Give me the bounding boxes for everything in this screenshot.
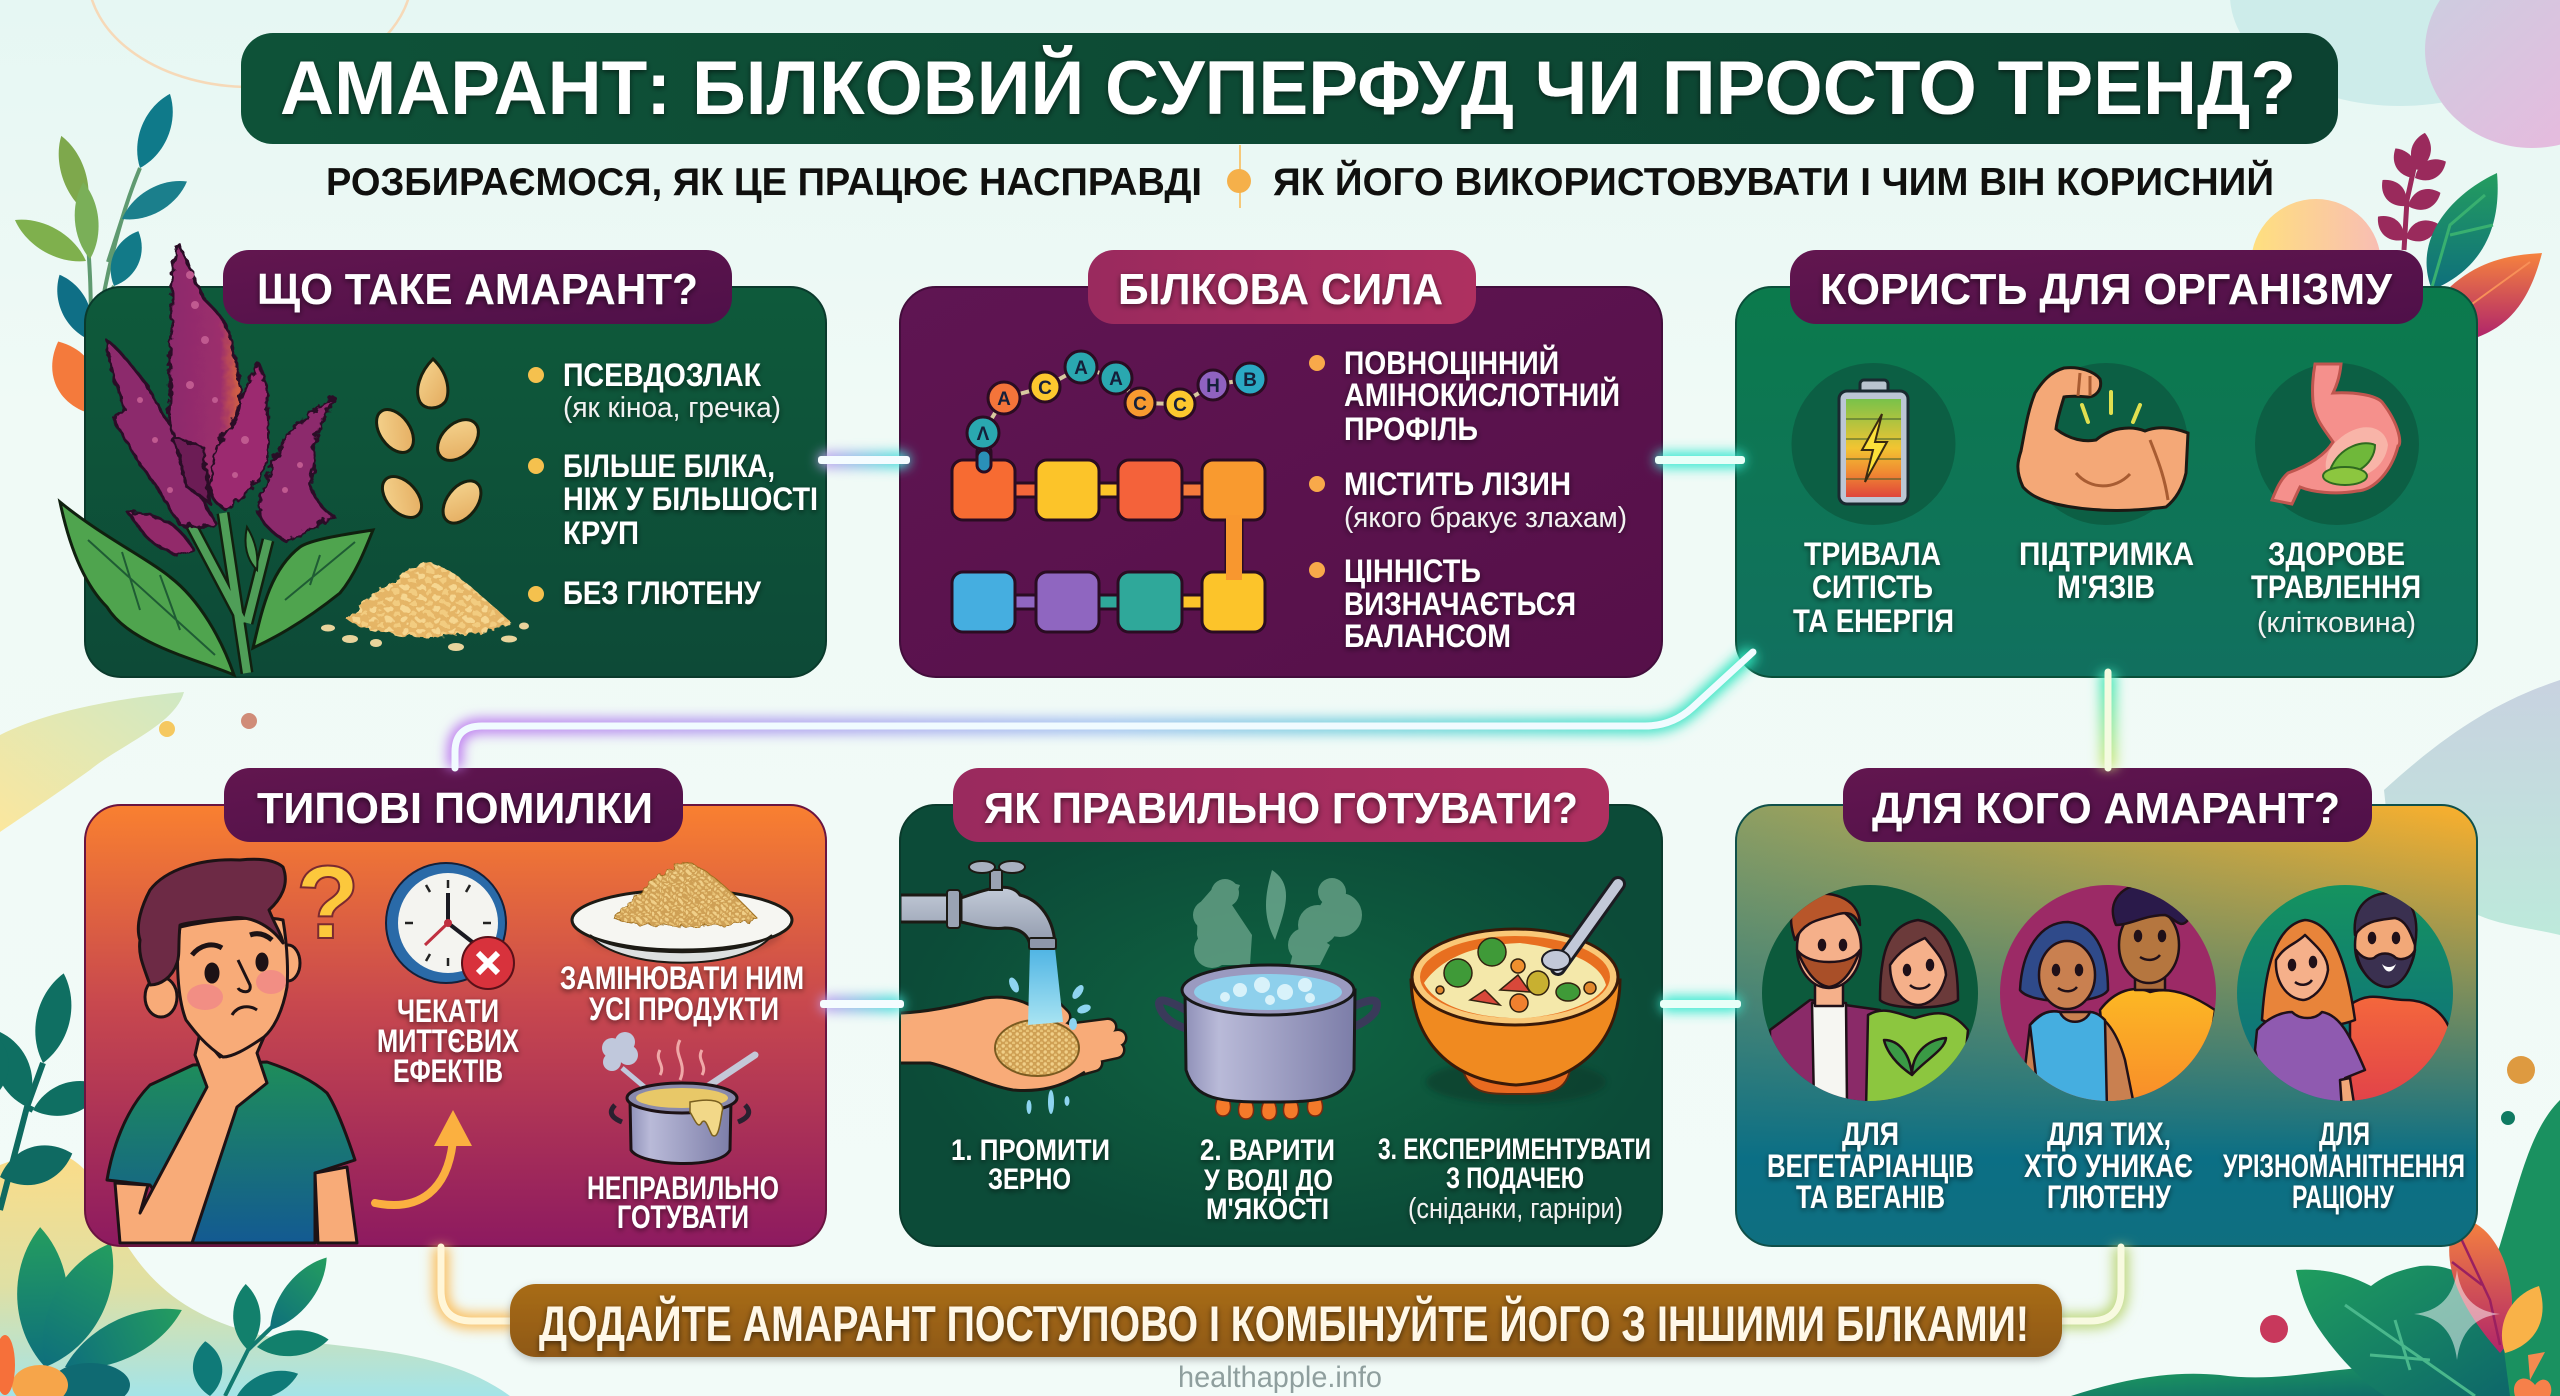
text: expect instant effects: ЕФЕКТІВ: [393, 1053, 503, 1089]
list: protein power: БАЛАНСОМ: [1344, 618, 1511, 654]
chart: amino acid chain: C: [1173, 395, 1187, 416]
heading: who amaranth is for: ДЛЯ КОГО АМАРАНТ?: [1872, 784, 2340, 833]
text: benefits captions: (клітковина): [2257, 607, 2416, 639]
list: protein power: МІСТИТЬ ЛІЗИН: [1344, 466, 1571, 502]
text: audience captions: ДЛЯ: [1842, 1116, 1899, 1152]
list: protein power: ПРОФІЛЬ: [1344, 411, 1478, 447]
list: what is amaranth: ПСЕВДОЗЛАК: [563, 357, 761, 393]
chart: amino acid chain: A: [1074, 358, 1088, 379]
icon: battery: [1792, 363, 1956, 525]
text: step three: (сніданки, гарніри): [1408, 1193, 1623, 1225]
panel: who amaranth is for: [1736, 768, 2477, 1246]
decor: left lower leaves: [0, 970, 338, 1396]
text: expect instant effects: [377, 993, 520, 1089]
chart: amino acid chain: Λ: [977, 424, 990, 445]
connector: purple line from benefits to mistakes: [455, 652, 1753, 768]
text: expect instant effects: ЧЕКАТИ: [397, 993, 499, 1029]
chart: amino acid chain: C: [1038, 378, 1052, 399]
chart: amino acid chain: A: [997, 389, 1011, 410]
text: audience captions: ТА ВЕГАНІВ: [1796, 1179, 1945, 1215]
text: cook incorrectly: ГОТУВАТИ: [617, 1199, 749, 1235]
list: protein power: [1309, 345, 1627, 654]
text: step three: З ПОДАЧЕЮ: [1446, 1162, 1584, 1195]
text: step two: 2. ВАРИТИ: [1200, 1134, 1335, 1167]
icon: boiling pot: [1159, 870, 1377, 1120]
text: benefits captions: ТРАВЛЕННЯ: [2251, 569, 2421, 605]
text: step one: 1. ПРОМИТИ: [951, 1134, 1110, 1167]
text: benefits captions: ТРИВАЛА: [1804, 536, 1941, 572]
list: what is amaranth: (як кіноа, гречка): [563, 392, 781, 424]
chart: amino acid chain: [952, 351, 1266, 632]
icon: stomach: [2255, 363, 2419, 525]
heading: protein power: БІЛКОВА СИЛА: [1118, 265, 1443, 314]
text: step three: [1378, 1133, 1651, 1225]
text: audience captions: УРІЗНОМАНІТНЕННЯ: [2223, 1148, 2465, 1184]
panel: typical mistakes: [85, 768, 826, 1246]
icon: plate with grain: [572, 862, 792, 963]
title banner: АМАРАНТ: БІЛКОВИЙ СУПЕРФУД ЧИ ПРОСТО ТРЕНД?: [280, 45, 2296, 131]
icon: amaranth plant: [60, 243, 373, 675]
text: benefits captions: М'ЯЗІВ: [2057, 569, 2155, 605]
text: benefits captions: ПІДТРИМКА: [2019, 536, 2194, 572]
text: expect instant effects: МИТТЄВИХ: [377, 1023, 520, 1059]
list: protein power: ЦІННІСТЬ: [1344, 553, 1481, 589]
icon: amaranth seeds: [369, 359, 489, 530]
text: cook incorrectly: [587, 1170, 779, 1235]
heading: benefits: КОРИСТЬ ДЛЯ ОРГАНІЗМУ: [1820, 265, 2393, 314]
list: what is amaranth: КРУП: [563, 515, 639, 551]
connector: cooking to audience: [1660, 996, 1741, 1012]
list: what is amaranth: НІЖ У БІЛЬШОСТІ: [563, 481, 818, 517]
list: protein power: ПОВНОЦІННИЙ: [1344, 345, 1559, 381]
icon: varied diet couple: [2237, 885, 2453, 1110]
text: audience captions: ГЛЮТЕНУ: [2047, 1179, 2172, 1215]
text: replace all foods: УСІ ПРОДУКТИ: [589, 991, 779, 1027]
connector: audience to call to action: [2055, 1247, 2121, 1321]
connector: mistakes to call to action: [441, 1247, 515, 1321]
connector: what is to protein: [818, 452, 910, 468]
heading: how to cook: ЯК ПРАВИЛЬНО ГОТУВАТИ?: [984, 784, 1578, 833]
icon: bowl with porridge: [1411, 884, 1620, 1104]
list: protein power: ВИЗНАЧАЄТЬСЯ: [1344, 586, 1576, 622]
list: protein power: АМІНОКИСЛОТНИЙ: [1344, 377, 1620, 413]
text: audience captions: ДЛЯ: [2319, 1116, 2370, 1152]
text: replace all foods: [560, 960, 804, 1027]
icon: vegetarian couple: [1762, 885, 1978, 1110]
heading: how to cook: [953, 768, 1609, 842]
connector: mistakes to cooking: [820, 996, 904, 1012]
text: step two: У ВОДІ ДО: [1204, 1164, 1333, 1197]
connector: protein to benefits: [1655, 452, 1745, 468]
icon: gluten-free couple: [2000, 884, 2216, 1110]
icon: pile of grain: [321, 562, 529, 651]
chart: amino acid chain: H: [1206, 376, 1220, 397]
icon: tap and washing hand: [900, 861, 1118, 1114]
list: protein power: (якого бракує злахам): [1344, 502, 1627, 534]
panel: protein power: [900, 250, 1662, 677]
panel: how to cook: [900, 768, 1662, 1246]
text: audience captions: ХТО УНИКАЄ: [2024, 1148, 2193, 1184]
icon: thinking man: [107, 859, 357, 1243]
text: benefits captions: ТА ЕНЕРГІЯ: [1793, 603, 1954, 639]
call to action banner: [510, 1284, 2062, 1357]
icon: boiling-over pot: [602, 1032, 755, 1164]
chart: amino acid chain: B: [1243, 370, 1257, 391]
heading: who amaranth is for: [1843, 768, 2372, 842]
panel: what is amaranth: [60, 243, 826, 677]
text: benefits captions: СИТІСТЬ: [1812, 569, 1933, 605]
text: step two: [1200, 1134, 1335, 1226]
heading: typical mistakes: [224, 768, 683, 842]
list: what is amaranth: БІЛЬШЕ БІЛКА,: [563, 448, 775, 484]
text: replace all foods: ЗАМІНЮВАТИ НИМ: [560, 960, 804, 996]
text: cook incorrectly: НЕПРАВИЛЬНО: [587, 1170, 779, 1206]
text: step one: ЗЕРНО: [988, 1163, 1071, 1196]
heading: protein power: [1088, 250, 1476, 324]
text: step three: 3. ЕКСПЕРИМЕНТУВАТИ: [1378, 1133, 1651, 1166]
chart: amino acid chain: A: [1109, 369, 1123, 390]
text: audience captions: РАЦІОНУ: [2292, 1179, 2395, 1215]
subtitle: [326, 145, 2274, 208]
icon: flexed arm: [2018, 363, 2188, 525]
arrow: upward curve: [375, 1110, 472, 1205]
panel: benefits: [1736, 250, 2477, 677]
connector: benefits to audience: [2100, 672, 2116, 768]
list: what is amaranth: [528, 357, 818, 611]
subtitle: ЯК ЙОГО ВИКОРИСТОВУВАТИ І ЧИМ ВІН КОРИСНИЙ: [1273, 159, 2274, 204]
icon: question mark: ?: [296, 845, 360, 961]
heading: benefits: [1790, 250, 2423, 324]
heading: what is amaranth: [223, 250, 732, 324]
text: step one: [951, 1134, 1110, 1196]
heading: what is amaranth: ЩО ТАКЕ АМАРАНТ?: [257, 265, 698, 314]
list: what is amaranth: БЕЗ ГЛЮТЕНУ: [563, 575, 762, 611]
footer: source: healthapple.info: [1178, 1361, 1382, 1394]
icon: clock with cross: [386, 863, 514, 989]
chart: amino acid chain: C: [1133, 394, 1147, 415]
decor: small dots: [159, 713, 2535, 1343]
decor: left upper leaves: [9, 89, 193, 423]
text: audience captions: ДЛЯ ТИХ,: [2047, 1116, 2171, 1152]
heading: typical mistakes: ТИПОВІ ПОМИЛКИ: [257, 784, 653, 833]
text: audience captions: ВЕГЕТАРІАНЦІВ: [1767, 1148, 1974, 1184]
text: benefits captions: ЗДОРОВЕ: [2268, 536, 2405, 572]
decor: bottom right leaves: [2296, 1218, 2551, 1396]
text: audience captions: [1767, 1116, 2465, 1215]
subtitle: РОЗБИРАЄМОСЯ, ЯК ЦЕ ПРАЦЮЄ НАСПРАВДІ: [326, 161, 1202, 204]
call to action banner: ДОДАЙТЕ АМАРАНТ ПОСТУПОВО І КОМБІНУЙТЕ ЙОГО З ІНШИМИ БІЛКАМИ!: [539, 1295, 2029, 1352]
text: benefits captions: [1793, 536, 2421, 639]
text: step two: М'ЯКОСТІ: [1206, 1193, 1329, 1226]
decor: top right leaves: [2371, 131, 2542, 337]
